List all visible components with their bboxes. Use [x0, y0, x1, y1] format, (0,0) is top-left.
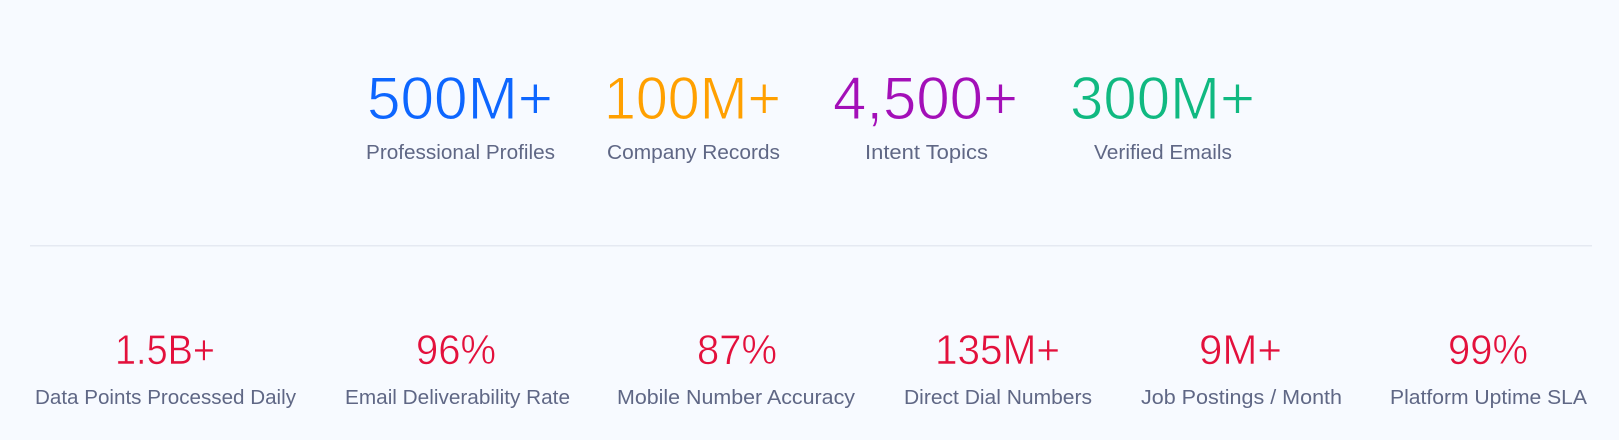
stat: professional profiles: 500M+	[367, 65, 553, 132]
stat: company records: 100M+	[604, 65, 781, 132]
stat: job postings per month: Job Postings / Month	[1141, 387, 1342, 409]
stat: company records	[604, 65, 781, 164]
stat: verified emails	[1070, 65, 1255, 164]
stat: mobile number accuracy: Mobile Number Accuracy	[617, 387, 855, 409]
stat: mobile number accuracy	[617, 326, 855, 409]
stat: platform uptime sla	[1390, 326, 1588, 409]
stat: direct dial numbers: 135M+	[935, 326, 1060, 373]
stat: professional profiles	[366, 65, 555, 164]
stat: direct dial numbers	[904, 326, 1092, 409]
stat: direct dial numbers: Direct Dial Numbers	[904, 387, 1092, 409]
stat: intent topics: 4,500+	[833, 65, 1018, 132]
stat: data points processed daily: Data Points Processed Daily	[35, 387, 296, 409]
stat: mobile number accuracy: 87%	[697, 326, 777, 373]
stat: data points processed daily	[35, 326, 296, 409]
stat: company records: Company Records	[607, 142, 780, 164]
stat: platform uptime sla: 99%	[1448, 326, 1528, 373]
stat: email deliverability rate: 96%	[416, 326, 496, 373]
stat: job postings per month: 9M+	[1199, 326, 1282, 373]
stat: email deliverability rate	[345, 326, 570, 409]
stat: professional profiles: Professional Profiles	[366, 142, 555, 164]
stat: intent topics	[833, 65, 1018, 164]
stat: intent topics: Intent Topics	[865, 142, 988, 164]
stat: platform uptime sla: Platform Uptime SLA	[1390, 387, 1588, 409]
stat: job postings per month	[1141, 326, 1342, 409]
stat: verified emails: Verified Emails	[1094, 142, 1232, 164]
stat: email deliverability rate: Email Deliverability Rate	[345, 387, 570, 409]
stat: verified emails: 300M+	[1070, 65, 1255, 132]
stat: data points processed daily: 1.5B+	[115, 326, 215, 373]
